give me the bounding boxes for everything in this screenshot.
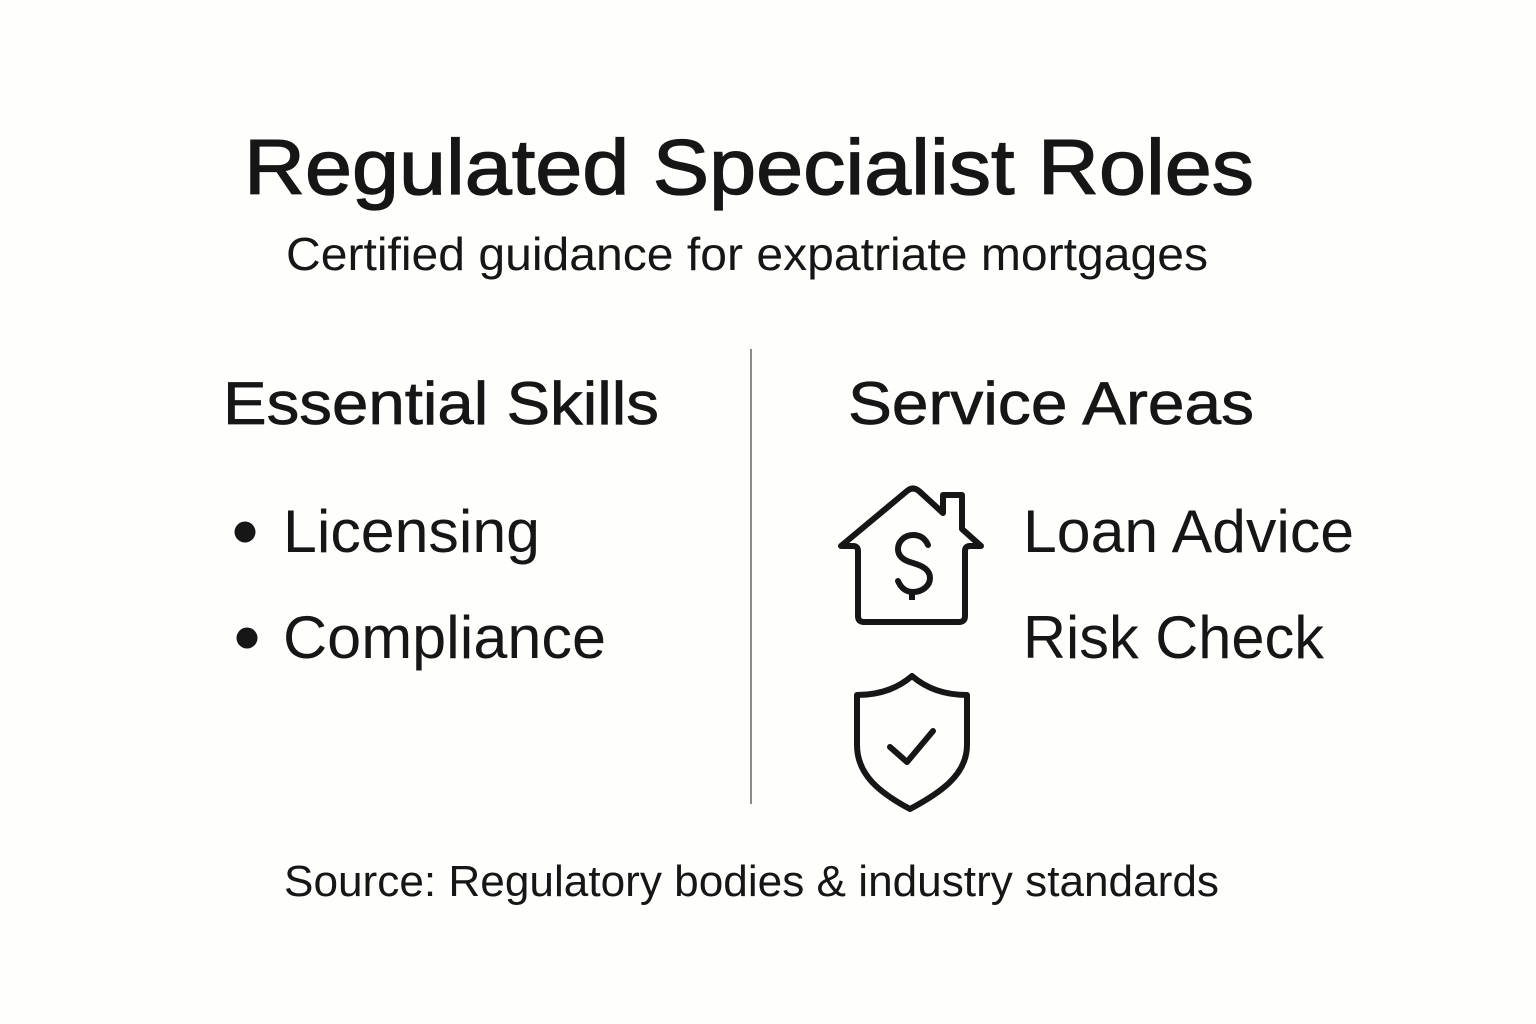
panel: essential skills: [223, 370, 659, 671]
list item: licensing: Licensing: [283, 498, 540, 565]
source note: Source: Regulatory bodies & industry standards: [284, 857, 1219, 906]
list item: compliance: Compliance: [283, 604, 606, 671]
text: loan advice: Loan Advice: [1023, 498, 1354, 565]
text: risk check: Risk Check: [1023, 604, 1325, 671]
divider: [750, 349, 752, 804]
icon: house with dollar sign: [841, 488, 981, 622]
title: Regulated Specialist Roles: [244, 123, 1254, 211]
panel: service areas: [841, 370, 1354, 809]
icon: shield with check mark: [857, 676, 967, 809]
subtitle: Certified guidance for expatriate mortgages: [286, 228, 1208, 280]
heading: service areas: Service Areas: [848, 370, 1254, 437]
heading: essential skills: Essential Skills: [223, 370, 659, 437]
